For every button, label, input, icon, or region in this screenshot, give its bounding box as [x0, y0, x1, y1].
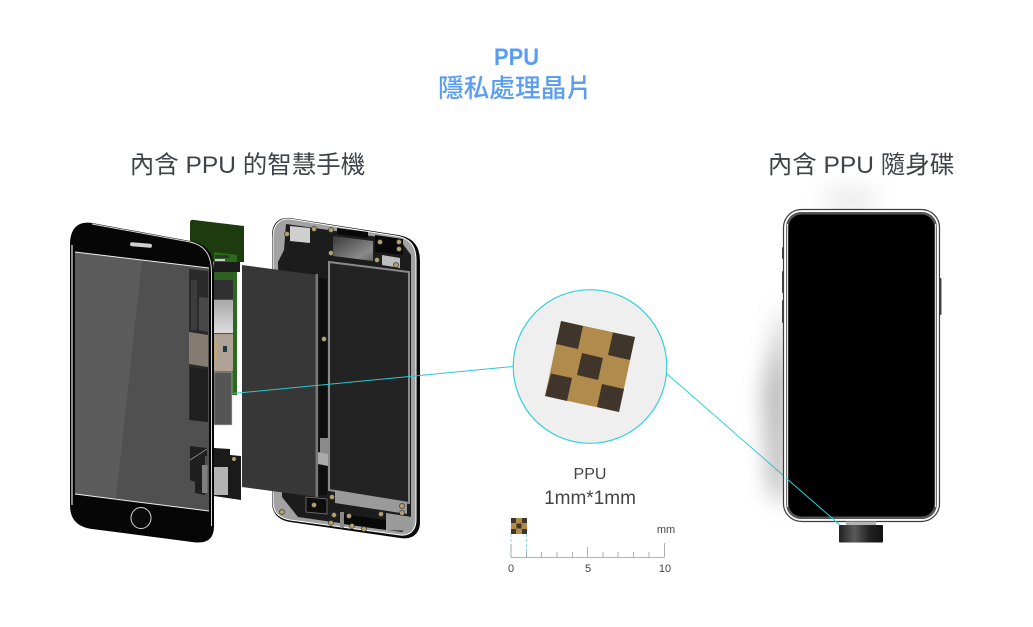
screws [280, 226, 404, 532]
scale ruler: mm [657, 524, 675, 536]
lower board module [214, 448, 241, 500]
logic board [190, 220, 244, 425]
connector [846, 522, 876, 526]
earpiece [130, 242, 152, 248]
front phone [70, 223, 214, 542]
title: PPU [494, 44, 539, 71]
heading: smartphone with PPU: 內含 PPU 的智慧手機 [130, 151, 365, 179]
connector line from phone [233, 366, 513, 394]
chip label [544, 466, 636, 509]
shadow [766, 300, 786, 505]
mini chip [511, 518, 527, 534]
chip label: PPU [574, 466, 606, 483]
magnified chip callout [513, 290, 667, 443]
scale ruler: 10 [659, 563, 671, 575]
flash drive [766, 192, 942, 542]
chip [545, 321, 635, 412]
title [438, 44, 592, 103]
chip label: 1mm*1mm [544, 488, 636, 509]
top camera bay [290, 226, 310, 243]
bottom bay [335, 490, 407, 514]
body [784, 210, 940, 522]
line overlay on drive [786, 478, 840, 525]
connector line to flash drive [666, 373, 840, 525]
scale ruler [508, 518, 675, 575]
title: 隱私處理晶片 [438, 74, 592, 103]
back phone housing [272, 218, 420, 538]
scale ruler: 0 [508, 563, 514, 575]
heading: flash drive with PPU: 內含 PPU 隨身碟 [768, 151, 954, 179]
main battery cell [329, 262, 409, 503]
screen [75, 252, 209, 511]
scale ruler: 5 [585, 563, 591, 575]
home button [131, 508, 151, 528]
battery panel [242, 265, 318, 497]
side buttons [782, 247, 784, 259]
